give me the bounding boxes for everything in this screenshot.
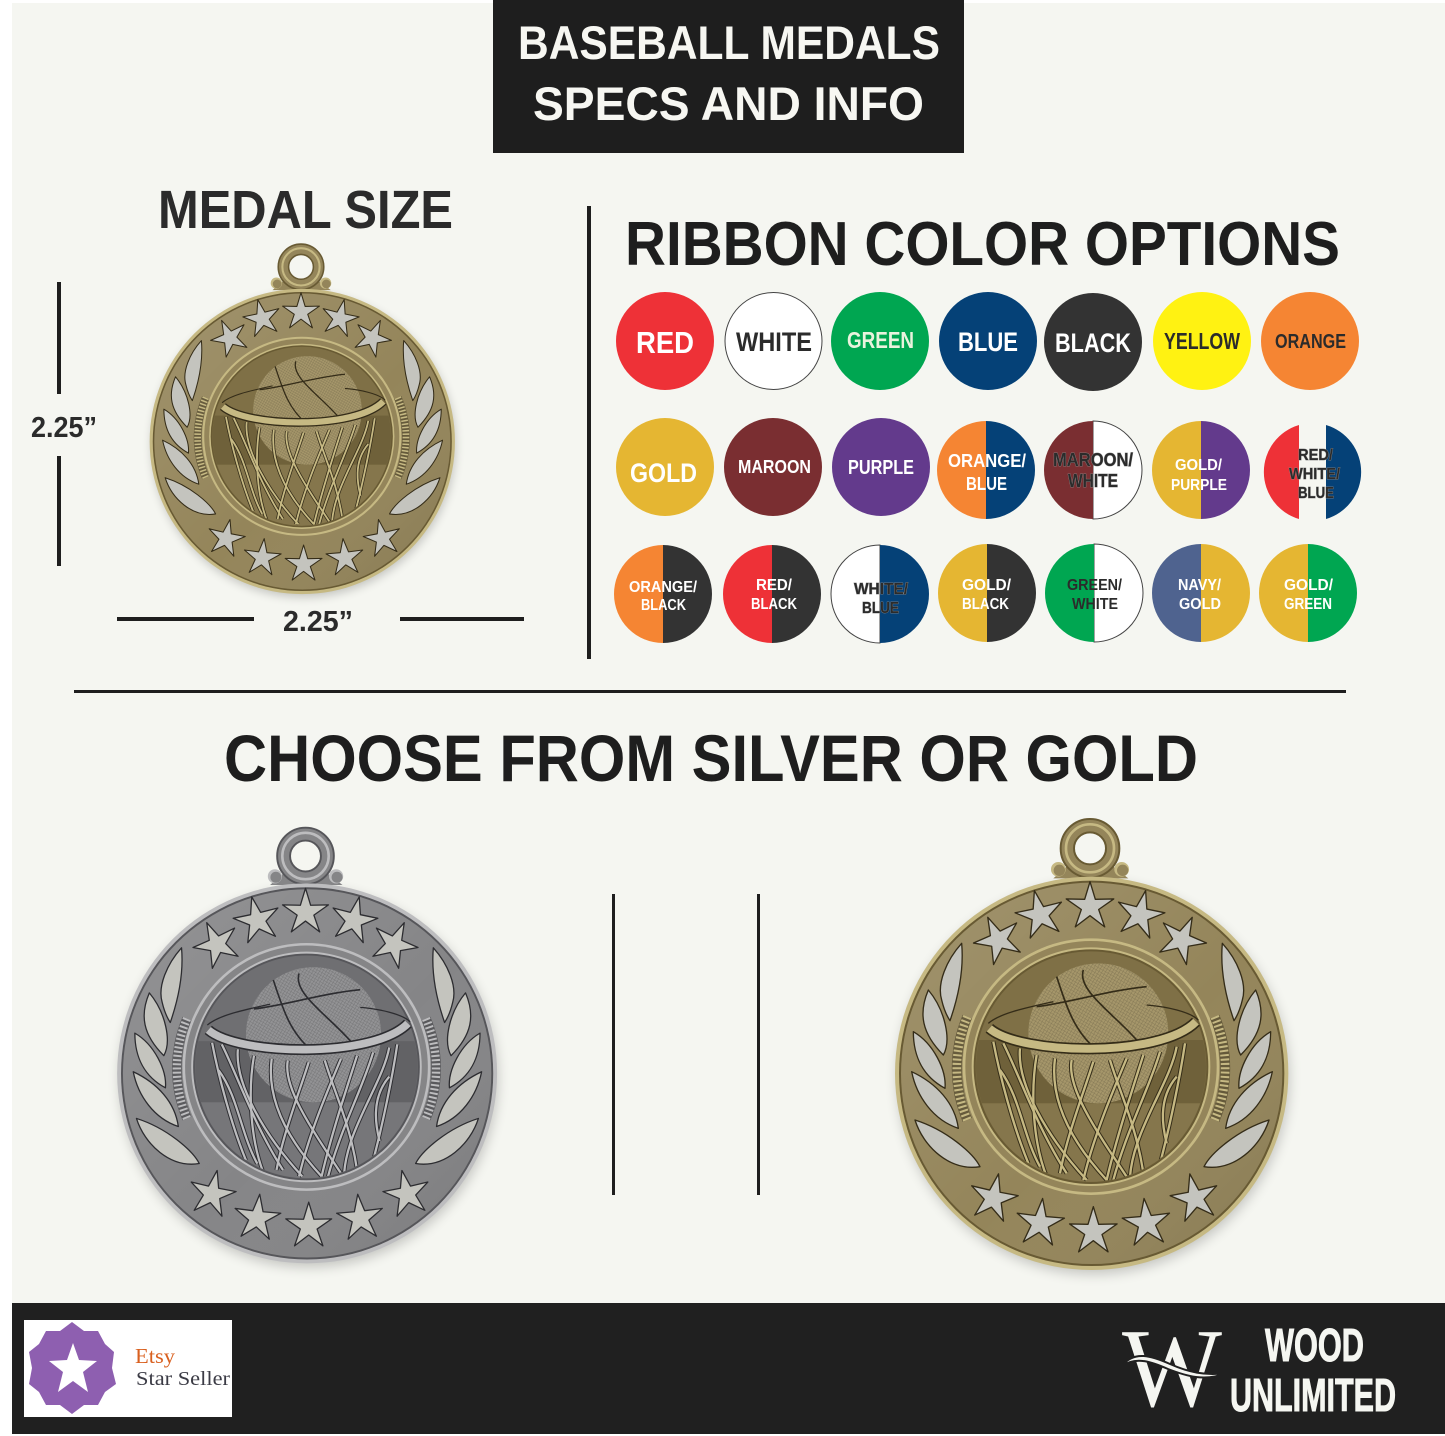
swatch: blue: BLUE [958, 327, 1018, 357]
swatch: black [1044, 293, 1142, 391]
swatch: gold/green: GREEN [1284, 596, 1332, 613]
badge: etsy star seller: Etsy [135, 1344, 176, 1368]
heading: choose from silver or gold: CHOOSE FROM SILVER OR GOLD [224, 721, 1198, 795]
medal: silver [117, 833, 497, 1267]
swatch: maroon [724, 418, 822, 516]
swatch: white/blue: BLUE [862, 600, 899, 617]
footer bar [12, 1303, 1445, 1434]
swatch: red/white/blue: WHITE/ [1289, 466, 1340, 483]
swatch: orange/black [614, 545, 712, 643]
swatch: maroon/white: WHITE [1068, 471, 1118, 491]
swatch: gold/green [1259, 544, 1357, 642]
swatch: red/black: RED/ [756, 577, 793, 594]
swatch: orange/blue: ORANGE/ [948, 451, 1026, 471]
badge: etsy star seller: Star Seller [136, 1368, 230, 1390]
swatch: red: RED [636, 325, 694, 360]
divider: horizontal [74, 690, 1346, 693]
swatch: white/blue: WHITE/ [854, 581, 909, 598]
logo: wood unlimited: WOOD [1265, 1319, 1364, 1371]
swatch: maroon: MAROON [738, 457, 811, 477]
badge: etsy star seller [24, 1320, 232, 1417]
swatch: red [616, 292, 714, 390]
swatch: green/white: GREEN/ [1067, 577, 1122, 594]
swatch: navy/gold: GOLD [1179, 596, 1221, 613]
swatch: navy/gold: NAVY/ [1178, 577, 1221, 594]
swatch: green/white [1045, 544, 1143, 642]
swatch: gold/purple: PURPLE [1171, 477, 1227, 494]
swatch: orange [1261, 292, 1359, 390]
swatch: gold/black: BLACK [962, 596, 1009, 613]
heading: ribbon color options: RIBBON COLOR OPTIONS [625, 210, 1340, 279]
swatch: black: BLACK [1055, 328, 1131, 358]
swatch: green/white: WHITE [1072, 596, 1118, 613]
swatch: gold/black [938, 544, 1036, 642]
swatch: gold/green: GOLD/ [1284, 577, 1334, 594]
medal: size reference [150, 248, 455, 597]
dimension: width: 2.25” [283, 606, 353, 638]
swatch: white/blue [831, 545, 929, 643]
swatch: yellow [1153, 292, 1251, 390]
swatch: orange/black: BLACK [641, 597, 686, 614]
swatch: orange/blue [937, 421, 1035, 519]
swatch: gold [616, 418, 714, 516]
swatch: red/white/blue: RED/ [1298, 447, 1334, 464]
dimension: width [117, 606, 524, 638]
medal: gold [895, 824, 1288, 1273]
title banner: SPECS AND INFO [533, 77, 924, 130]
swatch: gold/purple [1152, 421, 1250, 519]
swatch: maroon/white: MAROON/ [1053, 450, 1133, 470]
icon: purple star badge [29, 1322, 116, 1414]
swatch: red/white/blue: BLUE [1298, 485, 1334, 502]
swatch: white: WHITE [736, 327, 812, 357]
swatch: red/black [723, 545, 821, 643]
swatch: navy/gold [1152, 544, 1250, 642]
logo: wood unlimited [1122, 1307, 1396, 1431]
swatch: purple: PURPLE [848, 457, 914, 479]
swatch: blue [939, 292, 1037, 390]
swatch: purple [832, 418, 930, 516]
divider: right of center gap [757, 894, 760, 1195]
swatch: orange/blue: BLUE [966, 474, 1007, 494]
swatch: white [725, 292, 822, 390]
dimension: height [31, 282, 97, 566]
swatch: yellow: YELLOW [1164, 328, 1240, 354]
heading: medal size: MEDAL SIZE [158, 180, 453, 240]
swatch: maroon/white [1044, 421, 1142, 519]
swatch: green: GREEN [847, 327, 914, 353]
swatch: green [831, 292, 929, 390]
divider: left of center gap [612, 894, 615, 1195]
swatch: red/black: BLACK [751, 596, 797, 613]
title banner [493, 0, 964, 153]
swatch: red/white/blue [1264, 425, 1361, 519]
swatch: orange: ORANGE [1275, 331, 1346, 353]
swatch: gold: GOLD [630, 458, 697, 488]
divider: vertical [587, 206, 591, 659]
swatch: orange/black: ORANGE/ [629, 579, 698, 596]
panel: medal size [31, 180, 524, 638]
title banner: BASEBALL MEDALS [518, 16, 940, 69]
icon: W monogram: W [1122, 1307, 1222, 1431]
swatch: gold/purple: GOLD/ [1175, 457, 1223, 474]
panel: ribbon color options [614, 210, 1361, 643]
swatch: gold/black: GOLD/ [962, 577, 1012, 594]
dimension: height: 2.25” [31, 412, 97, 444]
